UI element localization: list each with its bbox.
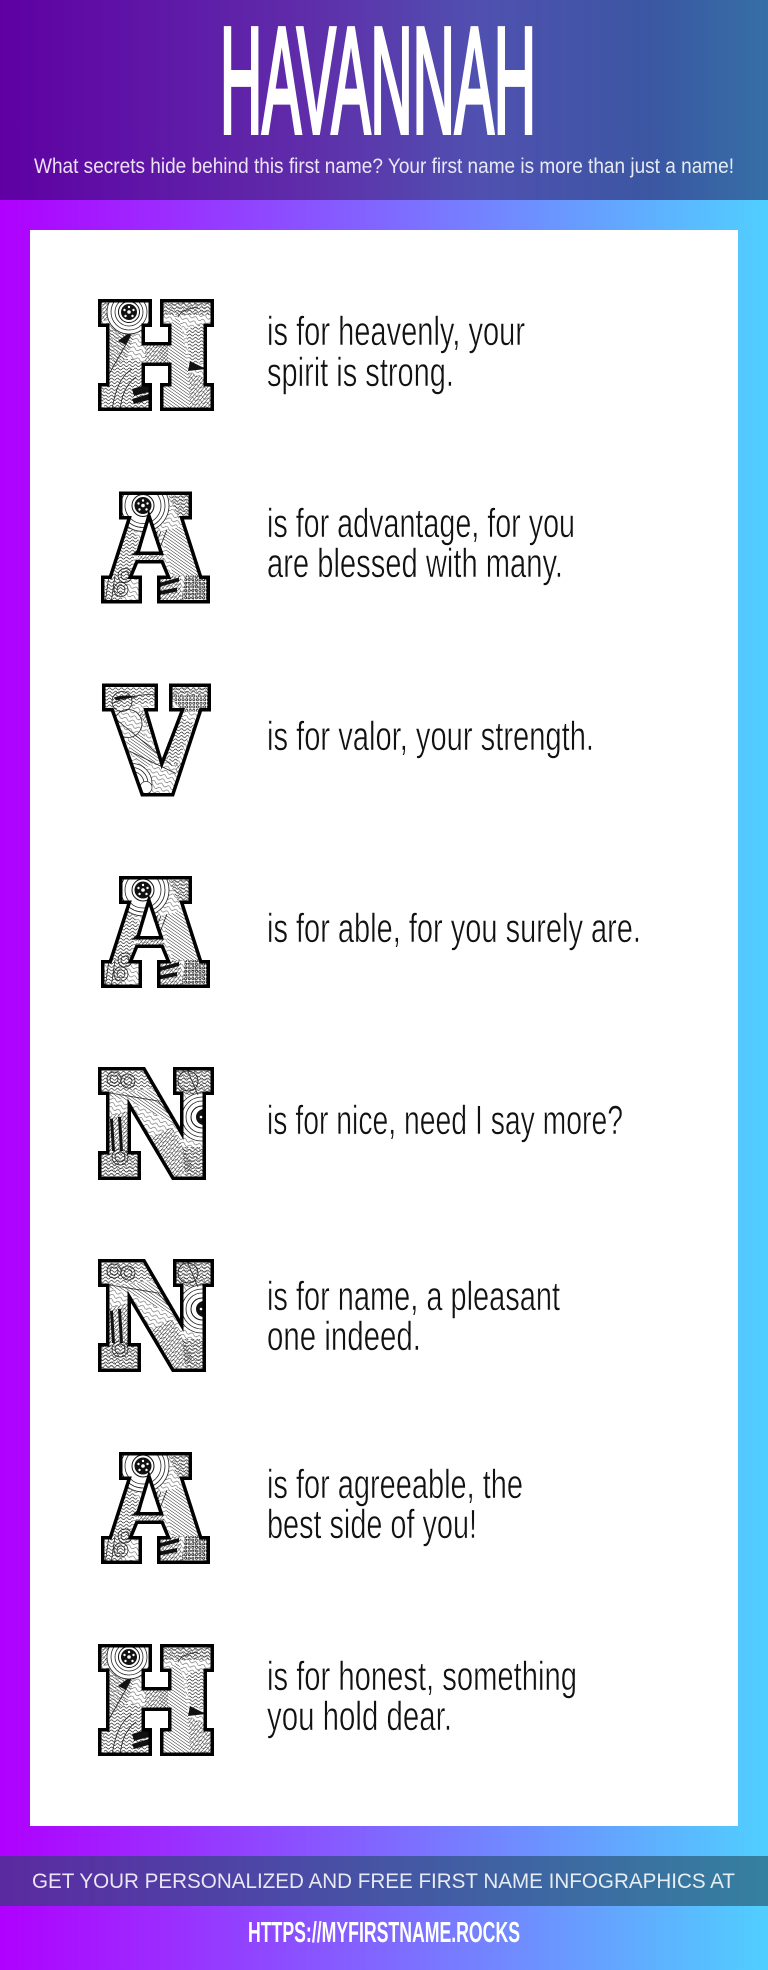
icon: patterned letter A (101, 876, 210, 988)
panel: white card (30, 230, 738, 1826)
icon: patterned letter H (98, 290, 214, 411)
icon: patterned letter V (102, 684, 211, 804)
row: A is for advantage: are blessed with many. (267, 540, 563, 586)
icon: patterned letter H (98, 1635, 214, 1756)
icon: patterned letter A (101, 1452, 210, 1564)
header banner (0, 0, 768, 200)
text: heavenly: is for heavenly, your (267, 308, 525, 354)
text: valor: is for valor, your strength. (267, 713, 594, 759)
row: N is for name (98, 1259, 560, 1373)
footer call to action: GET YOUR PERSONALIZED AND FREE FIRST NAME INFOGRAPHICS AT (32, 1870, 735, 1893)
footer url: HTTPS://MYFIRSTNAME.ROCKS (248, 1917, 520, 1949)
text: agreeable: is for agreeable, the (267, 1461, 523, 1507)
text: honest: is for honest, something (267, 1653, 577, 1699)
footer band (0, 1856, 768, 1906)
row: H is for heavenly: spirit is strong. (267, 349, 454, 395)
row: V is for valor (102, 684, 594, 804)
text: nice: is for nice, need I say more? (267, 1097, 623, 1143)
row: H is for heavenly (98, 290, 525, 411)
row: A is for agreeable: best side of you! (267, 1501, 477, 1547)
row: N is for nice (98, 1067, 623, 1181)
row: H is for honest: you hold dear. (267, 1693, 452, 1739)
row: H is for honest (98, 1635, 577, 1756)
icon: patterned letter N (98, 1259, 214, 1372)
text: name: is for name, a pleasant (267, 1273, 560, 1319)
text: advantage: is for advantage, for you (267, 500, 575, 546)
icon: patterned letter N (98, 1067, 214, 1180)
row: A is for able (101, 876, 638, 988)
row: N is for name: one indeed. (267, 1313, 421, 1359)
row: A is for advantage (101, 492, 573, 604)
row: A is for agreeable (101, 1452, 522, 1564)
icon: patterned letter A (101, 492, 210, 604)
